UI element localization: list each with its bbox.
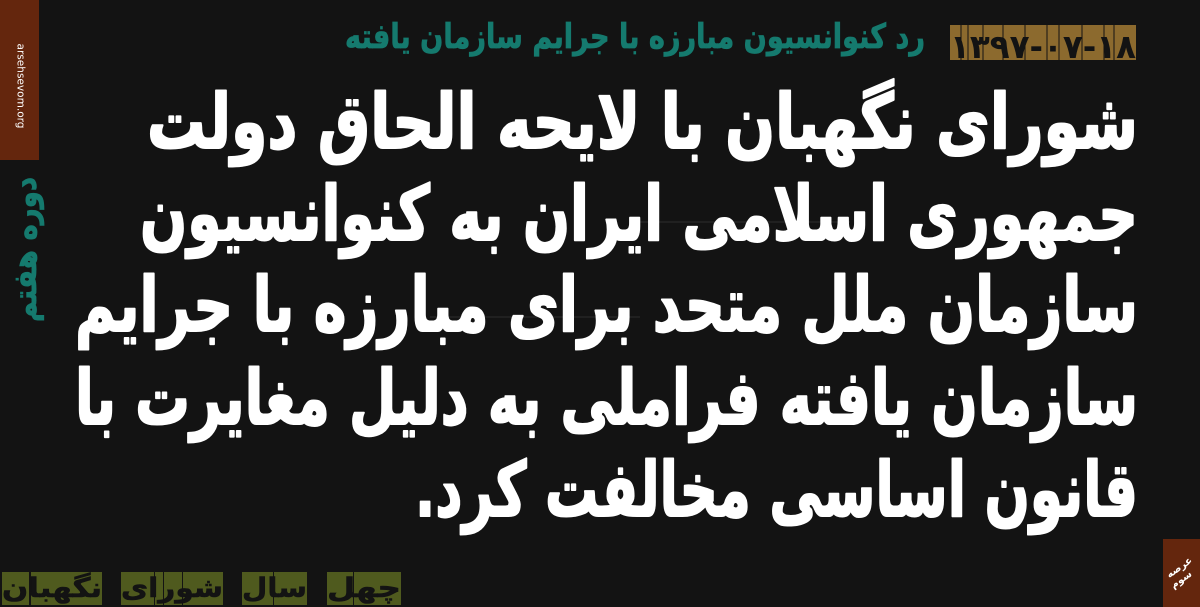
logo tab: سوم: [1169, 569, 1194, 591]
footer series title: چهل: [327, 573, 401, 604]
subtitle: رد کنوانسیون مبارزه با جرایم سازمان یافته: [345, 17, 925, 57]
vertical label: seventh term: دوره هفتم: [6, 177, 44, 322]
footer series title: نگهبان: [2, 572, 102, 604]
footer series title: سال: [242, 573, 307, 604]
main headline: [75, 77, 1138, 535]
side tab: website: [0, 0, 39, 160]
logo tab: [1163, 539, 1200, 607]
footer series title: [2, 572, 401, 605]
logo tab: عرصه: [1165, 555, 1195, 581]
footer series title: شورای: [121, 573, 223, 604]
date badge: ۱۳۹۷-۰۷-۱۸: [950, 27, 1136, 66]
side tab: website: arsehsevom.org: [14, 44, 28, 128]
